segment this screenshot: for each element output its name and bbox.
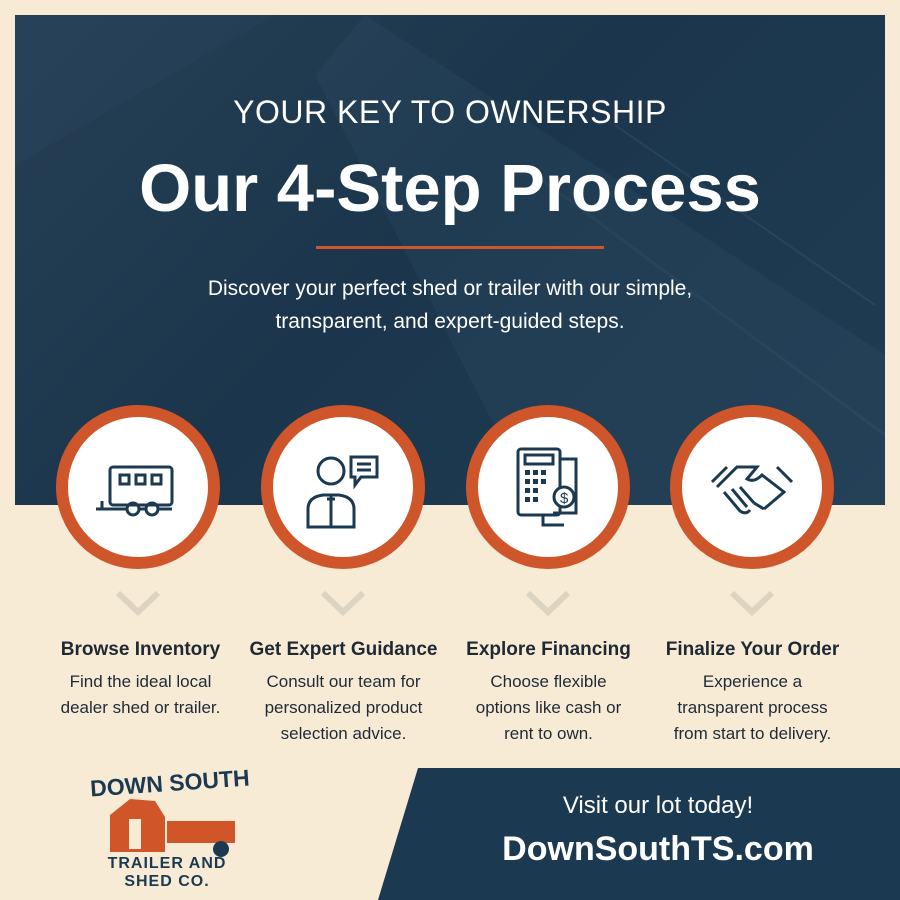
step 4: transparent process (677, 698, 828, 717)
step 4 (666, 639, 839, 743)
step 3: Choose flexible (490, 672, 607, 691)
hero panel (15, 15, 885, 505)
icon: trailer (56, 405, 220, 569)
step 2 (250, 639, 437, 743)
logo (89, 764, 250, 890)
intro text: transparent, and expert-guided steps. (275, 310, 625, 333)
logo: TRAILER AND (108, 855, 226, 872)
logo: SHED CO. (124, 873, 210, 890)
CTA panel (378, 768, 900, 900)
chevrons (116, 591, 774, 616)
divider (316, 246, 604, 249)
icon: calculator (466, 405, 630, 569)
step 3: rent to own. (504, 724, 593, 743)
icon: handshake (670, 405, 834, 569)
step 3: options like cash or (476, 698, 621, 717)
logo: DOWN SOUTH (89, 764, 250, 802)
icon: calculator: $ (560, 490, 569, 507)
step 1: Find the ideal local (70, 672, 211, 691)
step 1: dealer shed or trailer. (61, 698, 220, 717)
step 2: personalized product (265, 698, 422, 717)
subtitle: YOUR KEY TO OWNERSHIP (233, 94, 667, 130)
step 3 (466, 639, 631, 743)
CTA panel: Visit our lot today! (563, 792, 753, 819)
intro text: Discover your perfect shed or trailer with our simple, (208, 277, 692, 300)
intro text (208, 277, 692, 333)
step 2: selection advice. (281, 724, 406, 743)
title: Our 4-Step Process (139, 151, 761, 226)
icon: expert (261, 405, 425, 569)
step 4: from start to delivery. (674, 724, 831, 743)
step 4: Experience a (703, 672, 802, 691)
step 2: Consult our team for (266, 672, 420, 691)
CTA panel: DownSouthTS.com (502, 830, 814, 868)
step 1: Browse Inventory (61, 639, 220, 660)
step 3: Explore Financing (466, 639, 631, 660)
step 2: Get Expert Guidance (250, 639, 437, 660)
step 4: Finalize Your Order (666, 639, 839, 660)
step 1 (61, 639, 220, 717)
